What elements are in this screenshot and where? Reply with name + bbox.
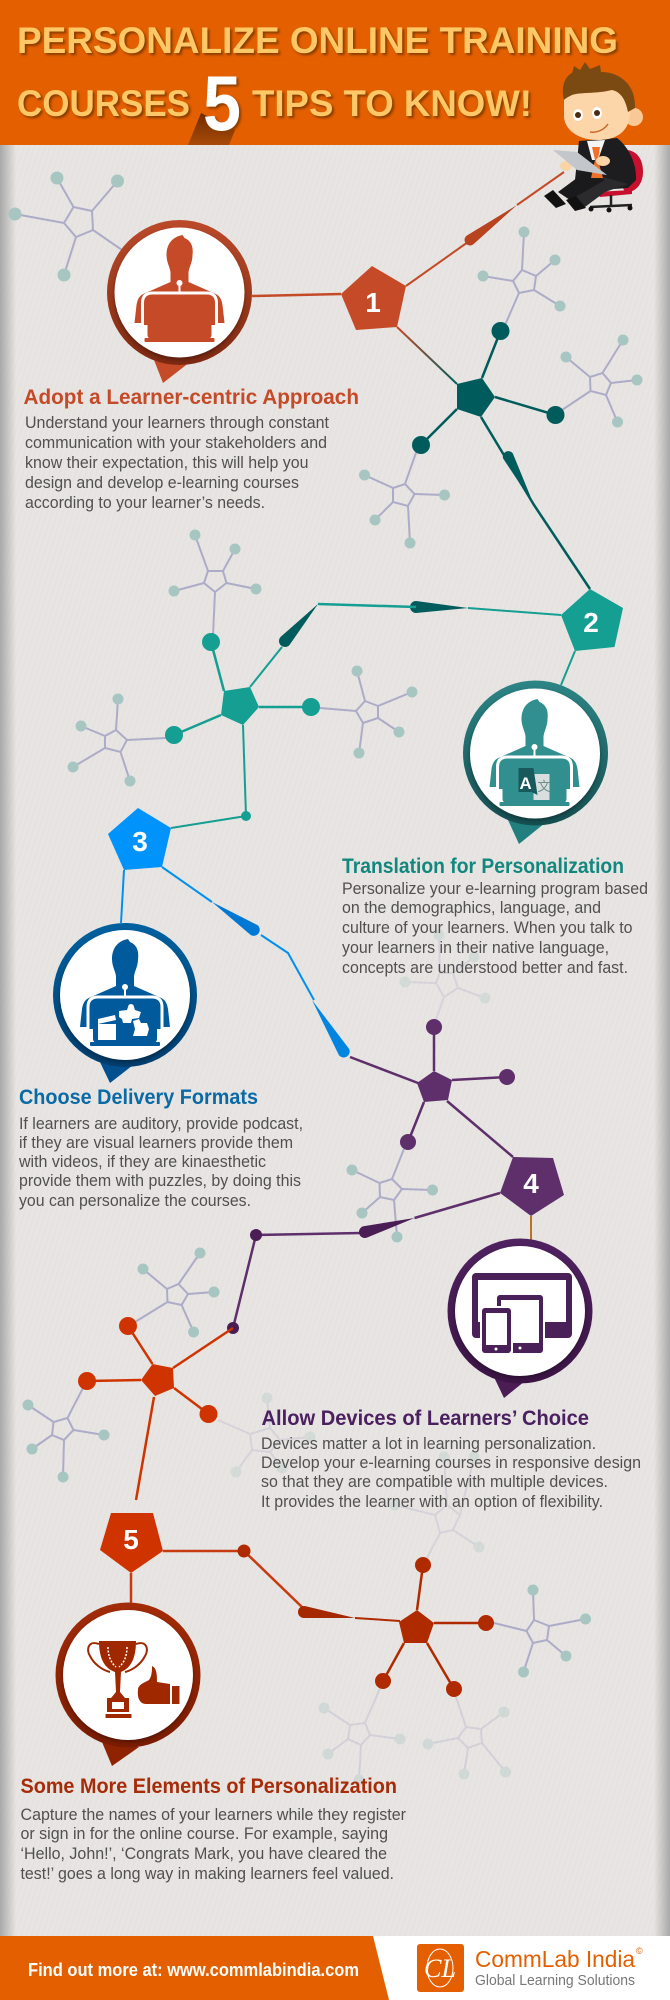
medallion 5: trophy and thumb icon: [56, 1602, 200, 1766]
molecule: faint lower left of step 5 hub: [318, 1688, 406, 1786]
section 1 text: design and develop e-learning courses: [25, 473, 299, 492]
title: 5: [203, 59, 241, 147]
molecule: right of step 5 hub: [494, 1584, 591, 1678]
molecule: faint lower right of step 5 hub: [422, 1697, 511, 1780]
logo: CommLab India: Global Learning Solutions: [475, 1972, 635, 1989]
section 2 text: concepts are understood better and fast.: [342, 958, 628, 977]
network: step 1 badge: 1: [365, 287, 381, 318]
network: teal hub: [412, 322, 590, 589]
section 4 text: It provides the learner with an option of flexibility.: [261, 1492, 603, 1511]
section 3 text: provide them with puzzles, by doing this: [19, 1171, 301, 1190]
section 3 text: [18, 1086, 303, 1210]
legs: [573, 176, 628, 207]
header band: [0, 0, 670, 145]
section 1 text: Adopt a Learner-centric Approach: [24, 386, 359, 409]
molecule: top left: [8, 172, 124, 282]
network: step 2 badge: 2: [583, 607, 599, 638]
eyes: [573, 109, 583, 121]
hands behind tablet: [560, 161, 572, 171]
left edge shading: [0, 145, 16, 1936]
section 5 text: Some More Elements of Personalization: [20, 1775, 397, 1798]
network: step 1 connectors: [252, 172, 564, 384]
molecule: right of step 1 lower: [560, 334, 642, 428]
head: [564, 84, 630, 140]
section 4 text: so that they are compatible with multiple devices.: [261, 1472, 608, 1491]
network: step 5 hub: [375, 1557, 494, 1697]
network: step 1 badge: [341, 266, 406, 330]
network: step 5 badge: [100, 1513, 163, 1573]
logo: CommLab India: [417, 1944, 643, 1992]
medallion 1: learner icon: [107, 220, 252, 383]
section 5 text: Capture the names of your learners while they register: [20, 1805, 406, 1824]
medallion 2: translation icon: [463, 680, 608, 844]
section 2 text: on the demographics, language, and: [342, 898, 601, 917]
network: step 4 badge: [500, 1157, 564, 1216]
section 1 text: communication with your stakeholders and: [25, 433, 327, 452]
title: PERSONALIZE ONLINE TRAINING: [17, 20, 618, 61]
title: TIPS TO KNOW!: [252, 83, 532, 124]
section 1 text: Understand your learners through constant: [25, 413, 329, 432]
network: step 5 badge: 5: [123, 1524, 139, 1555]
molecule: right of step 1 upper: [478, 226, 566, 325]
network: orange hub: [78, 1317, 233, 1500]
section 2 text: Personalize your e-learning program based: [342, 879, 648, 898]
molecule: right of step 2 hub: [320, 666, 418, 758]
icon: person with media laptop: [80, 939, 170, 1046]
network: step 3 badge: [108, 808, 171, 870]
smile: [590, 124, 608, 132]
section 4 text: Devices matter a lot in learning personalization.: [261, 1434, 596, 1453]
logo: CommLab India: ©: [636, 1946, 643, 1956]
title: COURSES: [17, 83, 190, 124]
tablet: [553, 150, 607, 175]
section 2 text: Translation for Personalization: [342, 855, 624, 878]
network: step 4 connectors: [227, 1193, 531, 1334]
icon: thumbs up: [138, 1666, 180, 1704]
section 4 text: Develop your e-learning courses in responsive design: [261, 1453, 641, 1472]
molecule: above orange hub: [135, 1248, 220, 1338]
suit: [575, 138, 636, 190]
section 3 text: If learners are auditory, provide podcast,: [19, 1114, 303, 1133]
molecule: below step 4 hub: [346, 1149, 438, 1242]
network: step 3 connectors: [121, 867, 350, 1057]
network: step 3 badge: 3: [132, 826, 148, 857]
footer band: Find out more at: www.commlabindia.com: [28, 1960, 359, 1980]
section 5 text: [20, 1775, 406, 1883]
network: purple hub: [350, 1019, 515, 1157]
hand on tablet: [596, 156, 610, 166]
section 3 text: with videos, if they are kinaesthetic: [18, 1152, 266, 1171]
section 3 text: Choose Delivery Formats: [19, 1086, 258, 1109]
section 3 text: if they are visual learners provide them: [19, 1133, 293, 1152]
network: step 2 badge: [561, 589, 623, 651]
molecule: left of step 2 hub: [68, 694, 166, 786]
shoes: [544, 190, 566, 208]
icon: monitor tablet phone: [472, 1273, 572, 1355]
title: [17, 20, 618, 147]
network: step 5 connectors: [131, 1544, 400, 1621]
section 4 text: Allow Devices of Learners’ Choice: [262, 1407, 589, 1430]
section 3 text: you can personalize the courses.: [19, 1191, 251, 1210]
shirt and tie: [587, 140, 605, 160]
section 1 text: according to your learner’s needs.: [25, 493, 265, 512]
hair: [563, 62, 635, 112]
logo: CommLab India: CommLab India: [475, 1946, 635, 1972]
section 1 text: know their expectation, this will help you: [25, 453, 308, 472]
network: step 2 connectors: [250, 601, 575, 687]
section 2 text: culture of your learners. When you talk to: [342, 918, 632, 937]
molecule: faint behind step 4 text left: [218, 1392, 316, 1478]
logo: CommLab India: CL: [424, 1954, 456, 1983]
icon: person with translation laptop: [490, 699, 580, 806]
molecule: faint behind step 2 text: [400, 930, 490, 1020]
section 2 text: [342, 855, 648, 977]
molecule: left of orange hub: [22, 1388, 110, 1482]
network: step 4 badge: 4: [523, 1168, 539, 1199]
section 2 text: your learners in their native language,: [342, 938, 609, 957]
section 5 text: ‘Hello, John!’, ‘Congrats Mark, you have cleared the: [20, 1844, 387, 1863]
molecule: below teal hub: [359, 450, 450, 548]
molecule: above step 2 hub: [168, 530, 262, 635]
right edge shading: [654, 145, 670, 1936]
icon: trophy: [88, 1641, 147, 1718]
molecule: faint behind step 4 text right: [390, 1452, 484, 1558]
icon: person with translation laptop: A: [520, 774, 532, 793]
icon: person with laptop: [134, 235, 224, 342]
ear: [625, 108, 643, 126]
footer band: [0, 1936, 670, 2000]
section 5 text: or sign in for the online course. For example, saying: [20, 1824, 388, 1843]
medallion 3: delivery formats icon: [53, 923, 197, 1083]
medallion 4: devices icon: [448, 1238, 592, 1398]
section 5 text: test!’ goes a long way in making learners feel valued.: [20, 1864, 394, 1883]
icon: person with translation laptop: 文: [538, 779, 551, 794]
chair: [620, 150, 643, 193]
network: step 2 hub: [165, 633, 320, 828]
section 4 text: [261, 1407, 641, 1511]
section 1 text: [24, 386, 359, 512]
character: businessman on chair with tablet: [544, 62, 643, 212]
